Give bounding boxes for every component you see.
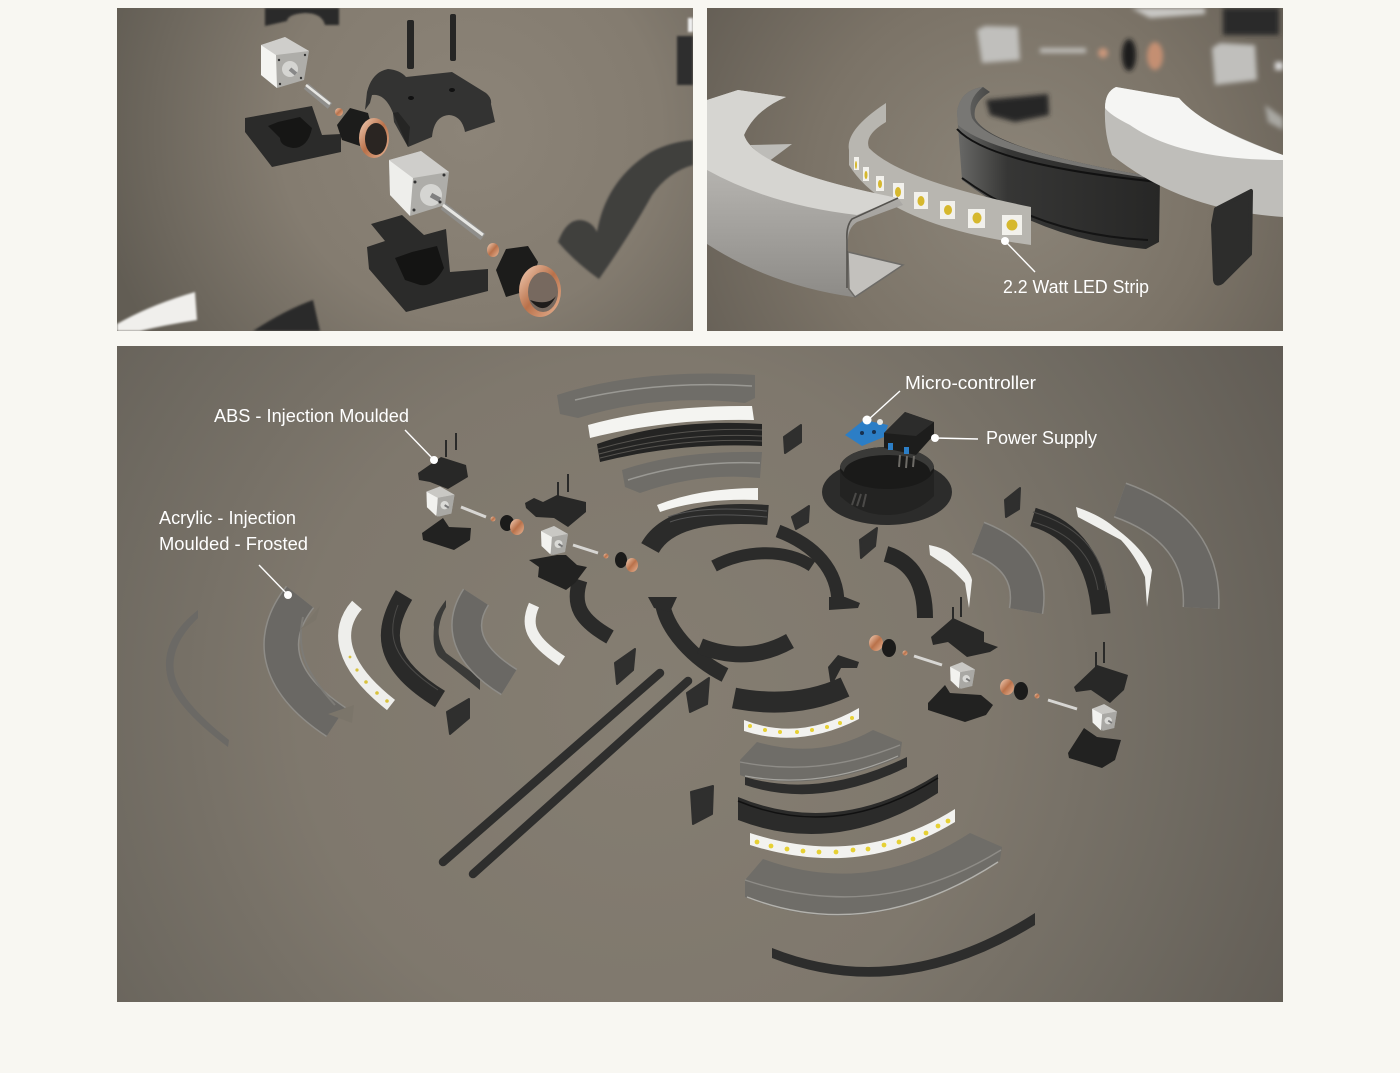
large bottom acrylic xyxy=(745,833,1002,916)
bottom LED strip small xyxy=(744,708,859,738)
shaft lower xyxy=(443,205,483,237)
callout: micro-controller: Micro-controller xyxy=(905,373,1036,393)
white strip two xyxy=(530,605,562,661)
second acrylic xyxy=(467,597,509,682)
LED strip large xyxy=(750,809,955,858)
power supply xyxy=(884,412,934,468)
callout: acrylic frosted: Moulded - Frosted xyxy=(159,534,308,554)
black strip large xyxy=(738,774,938,834)
rods xyxy=(443,673,688,874)
callout: micro-controller xyxy=(862,373,1036,424)
end caps xyxy=(447,425,1020,824)
panel: LED strip close-up xyxy=(707,8,1283,331)
blurred background parts xyxy=(117,8,693,331)
end cap xyxy=(1213,191,1251,284)
panel: connector assembly close-up xyxy=(117,8,693,331)
cube lower xyxy=(389,151,449,216)
LED strip xyxy=(849,103,1031,245)
label: LED strip callout: 2.2 Watt LED Strip xyxy=(1003,277,1149,297)
callout: power supply: Power Supply xyxy=(986,428,1097,448)
left connector assembly two xyxy=(525,474,638,590)
callout: acrylic frosted xyxy=(159,508,308,599)
right arcs xyxy=(886,500,1201,618)
right connector assembly one xyxy=(869,597,998,722)
left connector assembly one xyxy=(418,433,524,550)
panel: full exploded view xyxy=(117,346,1283,1002)
white small xyxy=(929,545,972,608)
small bottom acrylic xyxy=(740,730,902,782)
black profile xyxy=(957,87,1160,249)
right connector assembly two xyxy=(1000,642,1128,768)
bottom thin arc xyxy=(772,913,1035,977)
black cap xyxy=(365,69,495,147)
microcontroller xyxy=(845,419,888,446)
power hub xyxy=(822,447,952,525)
callout: ABS injection moulded xyxy=(214,406,438,464)
tray lower xyxy=(367,215,488,312)
ring feet xyxy=(648,597,860,687)
blurred background parts xyxy=(977,8,1283,130)
central black rings xyxy=(650,509,845,702)
disc and ring upper xyxy=(335,108,389,158)
black ribbed left xyxy=(390,595,440,699)
black ribbed two xyxy=(577,580,610,637)
shaft upper xyxy=(306,85,330,106)
top stack of profiles xyxy=(557,374,762,512)
silver profile right xyxy=(1105,87,1283,217)
posts xyxy=(407,14,456,69)
callout: power supply xyxy=(931,428,1097,448)
thin dark arc xyxy=(434,600,480,690)
white large xyxy=(1076,507,1152,607)
acrylic small xyxy=(978,538,1027,611)
black strip behind small acrylic xyxy=(745,757,907,794)
disc and ring lower xyxy=(487,243,561,317)
tray upper xyxy=(245,106,341,167)
callout: ABS injection moulded: ABS - Injection Moulded xyxy=(214,406,409,426)
ribbed large xyxy=(1033,517,1101,614)
white LED strip left xyxy=(345,605,391,705)
cube upper xyxy=(261,37,309,88)
callout: acrylic frosted: Acrylic - Injection xyxy=(159,508,296,528)
silver profile left xyxy=(707,90,903,297)
thin acrylic arc xyxy=(166,610,229,747)
ribbed small xyxy=(886,554,925,618)
large acrylic left xyxy=(281,597,354,723)
acrylic large xyxy=(1120,500,1201,608)
label: LED strip callout xyxy=(1001,237,1149,297)
